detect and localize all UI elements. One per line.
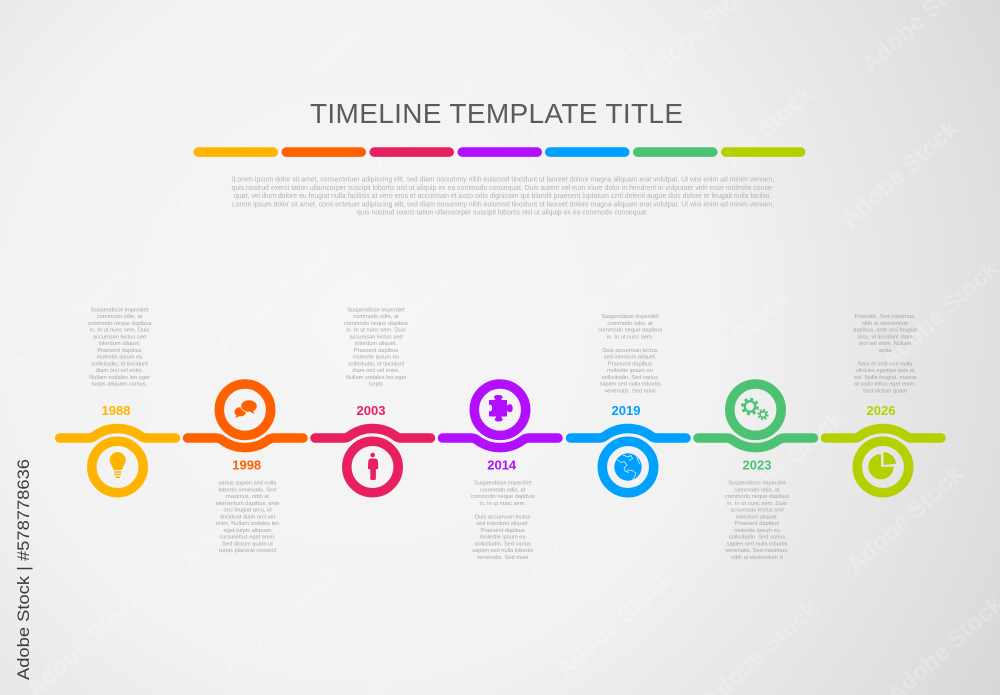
stock credit: Adobe Stock | #578778636 [14, 459, 33, 680]
icon: pie chart [868, 452, 896, 479]
text block 2026 [853, 314, 917, 394]
text block 2014 [471, 481, 535, 561]
text block 2003: in. In ut nunc sem. Duis [346, 328, 406, 334]
text block 2019: molestie ipsum eu [607, 368, 653, 374]
text block 2003: accumsan lectus sed [349, 334, 403, 340]
text block 1998 [216, 481, 279, 554]
text block 2003: Praesent dapibus [354, 348, 398, 354]
icon: globe [614, 453, 642, 481]
watermarks: Adobe Stock [171, 105, 299, 224]
text block 1998: eget turpis aliquam [223, 528, 272, 534]
text block 1998: enim. Nullam sodales leo [216, 521, 279, 527]
text block 1998: varius sapien sed nulla [219, 481, 277, 487]
text block 2014: in. In ut nunc sem. [479, 501, 526, 507]
text block 2003: commodo neque dapibus [344, 321, 408, 327]
text block 2003: Nullam sodales leo eget [346, 375, 407, 381]
text block 1988: commodo odio, at [97, 314, 143, 320]
watermarks: Adobe Stock [666, 285, 794, 404]
milestone 2026 [826, 314, 941, 493]
text block 2026: at sodo tellus eget enim. [854, 382, 916, 388]
text block 2019: sapien sed nulla lobortis [599, 382, 661, 388]
intro text: Lorem ipsum dolor sit amet, cons ectetuer adipiscing elit, sed diam nonummy nibh euismod tincidunt ut laoreet dolore magna aliquam erat volutpat. Ut wisi enim ad minim veniam, [232, 202, 774, 208]
text block 2023 [725, 481, 789, 561]
watermarks: Adobe Stock [836, 115, 964, 234]
text block 2023: Praesent dapibus [735, 521, 779, 527]
text block 1998: orci feugiat arcu, id [223, 508, 272, 514]
milestone 1998 [188, 384, 303, 554]
ring 2023 [730, 384, 781, 435]
text block 2023: sollicitudin. Sed varius [729, 535, 785, 541]
timeline band 1988 [60, 428, 176, 438]
text block 2026: nibh at elementum [862, 321, 909, 327]
text block 2003: turpis [369, 382, 383, 388]
text block 2003 [344, 308, 408, 388]
text block 2023: sapien sed nulla lobortis [726, 541, 788, 547]
watermarks: Adobe Stock [361, 415, 489, 534]
text block 2019: sed interdum aliquet. [604, 355, 657, 361]
intro text: quis nostrud exerci tation ullamcorper suscipit lobortis nisl ut aliquip ex ea commodo consequat. [357, 210, 648, 217]
text block 2003: diam orci vel enim. [352, 368, 400, 374]
year 2026: 2026 [867, 403, 895, 418]
timeline band 2003 [315, 428, 430, 438]
watermarks: Adobe Stock [51, 405, 179, 524]
text block 1988: molestie ipsum eu [97, 355, 142, 361]
watermarks: Adobe Stock [176, 455, 304, 574]
icon: gears [742, 399, 768, 419]
watermarks: Adobe Stock [721, 405, 849, 524]
watermarks: Adobe Stock [521, 25, 649, 144]
timeline band 2019 [570, 428, 686, 438]
text block 2019: sollicitudin. Sed varius [602, 375, 658, 381]
text block 2026: arcu, id tincidunt diam [857, 334, 913, 340]
watermarks: Adobe Stock [551, 565, 679, 684]
watermarks: Adobe Stock [841, 460, 969, 579]
timeline band 1998 [188, 438, 303, 448]
text block 1988: Praesent dapibus [97, 348, 142, 354]
milestone 2023 [698, 384, 814, 561]
text block 2023: in. In ut nunc sem. Duis [727, 501, 787, 507]
watermarks: Adobe Stock [546, 235, 674, 354]
watermarks: Adobe Stock [876, 255, 1000, 374]
year 2019: 2019 [612, 403, 640, 418]
icon: light bulb [110, 452, 126, 478]
text block 1988: turpis aliquam cursus. [92, 382, 148, 388]
watermarks: Adobe Stock [41, 59, 169, 178]
text block 2019: Suspendisse imperdiet [601, 314, 659, 320]
text block 1998: cursusellus eget enim. [219, 535, 276, 541]
text block 2003: Suspendisse imperdiet [347, 308, 405, 314]
text block 1998: tincidunt diam orci vel [220, 514, 275, 520]
text block 1998: lobortis venenatis. Sed [219, 487, 276, 493]
text block 1988: Nullam sodales leo eget [89, 375, 150, 381]
text block 2026: soda [879, 348, 892, 354]
watermarks: Adobe Stock [6, 260, 134, 379]
watermarks: Adobe Stock [521, 465, 649, 584]
text block 2026: Fnenatis. Sed maximus, [854, 314, 916, 320]
text block 2014: Suspendisse imperdiet [474, 481, 532, 487]
intro text: iLorem ipsum dolor sit amet, consectetuer adipiscing elit, sed diam nonummy nibh euismod tincidunt ut laoreet dolore magna aliquam erat volutpat. Ut wisi enim ad minim veniam, [232, 177, 774, 184]
ring 2019 [602, 441, 654, 493]
text block 2003: molestie ipsum eu [353, 355, 399, 361]
text block 2023: molestie ipsum eu [734, 528, 780, 534]
year 1998: 1998 [232, 458, 261, 472]
watermarks: Adobe Stock [356, 70, 484, 189]
text block 2026: Sed dictum quam [863, 388, 907, 394]
icon: puzzle piece [489, 395, 513, 422]
text block 2014: commodo odio, at [480, 487, 526, 493]
text block 2014: Duis accumsan lectus [475, 514, 531, 520]
text block 2003: sollicitudiu, id tincidunt [348, 362, 405, 368]
milestone 2014 [442, 384, 558, 561]
text block 1998: turpis placerat consect [219, 548, 276, 554]
intro text [232, 177, 775, 217]
text block 1998: Sed dictum quam ut [222, 541, 273, 547]
timeline band 2014 [442, 438, 558, 448]
milestone 2003 [315, 308, 430, 493]
ring 1988 [92, 441, 143, 493]
text block 2023: accumsan lectus sed [730, 508, 784, 514]
title: TIMELINE TEMPLATE TITLE [310, 98, 683, 129]
text block 2019: venenatis. Sed maxi [604, 388, 656, 394]
text block 2026: Nam et velit non nulla [858, 362, 913, 368]
text block 2023: Suspendisse imperdiet [728, 481, 786, 487]
text block 1988: Suspendisse imperdiet [91, 308, 149, 314]
text block 2023: interdum aliquet. [736, 514, 778, 520]
text block 2026: est. Nulla feugiat, massa [854, 375, 917, 381]
text block 2014: venenatis. Sed maxi [477, 555, 528, 561]
watermarks: Adobe Stock [691, 80, 819, 199]
text block 1988: in. In ut nunc sem. Duis [90, 328, 149, 334]
text block 2003: interdum aliquet. [355, 341, 397, 347]
text block 1988: commodo neque dapibus [88, 321, 152, 327]
text block 2014: sapien sed nulla lobortis [472, 548, 533, 554]
watermarks: Adobe Stock [216, 560, 344, 679]
milestone 1988 [60, 308, 176, 493]
ring 1998 [219, 384, 271, 435]
year 2023: 2023 [743, 458, 771, 472]
text block 2003: commodo odio, at [353, 314, 399, 320]
intro text: quat, vel illum dolore eu feugiat nulla facilisis at vero eros et accumsan et iusto odio dignissim qui blandit praesent luptatum zzril delenit augue duis dolore te feugait nulla facilisi. [234, 193, 771, 200]
icon: speech bubbles [234, 400, 257, 417]
text block 2023: commodo odio, at [734, 487, 780, 493]
text block 2014: Praesent dapibus [481, 528, 525, 534]
text block 2019: commodo neque dapibus [598, 328, 662, 334]
timeline band 2023 [698, 438, 814, 448]
watermarks: Adobe Stock [331, 270, 459, 389]
text block 2023: nibh at elementum d [731, 555, 783, 561]
text block 1988 [88, 308, 152, 388]
text block 2019: commodo odio, at [607, 321, 653, 327]
text block 1998: maximus, nibh at [226, 494, 269, 500]
year 2003: 2003 [357, 403, 385, 418]
ring 2014 [474, 384, 526, 435]
timeline band 2026 [826, 428, 941, 438]
text block 1998: elementum dapibus, ante [216, 501, 279, 507]
text block 2023: venenatis. Sed maximus, [725, 548, 789, 554]
text block 2026: ultricies egestas quis at [855, 368, 915, 374]
year 2014: 2014 [487, 458, 517, 472]
icon: person [368, 453, 378, 480]
text block 1988: interdum aliquet. [98, 341, 141, 347]
text block 2026: dapibus, ante orci feugiat [853, 328, 917, 334]
intro text: quis nostrud exerci tation ullamcorper suscipit lobortis nisl ut aliquip ex ea commodo consequat. Duis autem vel eum iriure dolor in hendrerit in vulputate velit esse molestie conse- [232, 185, 775, 192]
text block 2014: commodo neque dapibus [471, 494, 535, 500]
text block 2023: commodo neque dapibus [725, 494, 789, 500]
colour bar strip [194, 147, 806, 157]
text block 2019 [598, 314, 662, 394]
text block 2014: sollicitudin. Sed varius [475, 541, 531, 547]
text block 2019: Praesent dapibus [608, 362, 652, 368]
text block 2019: Duis accumsan lectus [602, 348, 658, 354]
text block 2014: sed interdum aliquet. [476, 521, 530, 527]
text block 1988: diam orci vel enim. [96, 368, 144, 374]
ring 2003 [347, 441, 398, 493]
ring 2026 [857, 441, 909, 493]
text block 2019: in. In ut nunc sem. [607, 334, 654, 340]
milestone 2019 [570, 314, 686, 493]
text block 1988: sollicitudiu, id tincidunt [91, 362, 148, 368]
text block 1988: accumsan lectus sed [93, 334, 146, 340]
watermarks: Adobe Stock [211, 240, 339, 359]
year 1988: 1988 [102, 403, 130, 418]
text block 2014: molestie ipsum eu [480, 535, 526, 541]
text block 2026: orci vel enim. Nullam [859, 341, 912, 347]
